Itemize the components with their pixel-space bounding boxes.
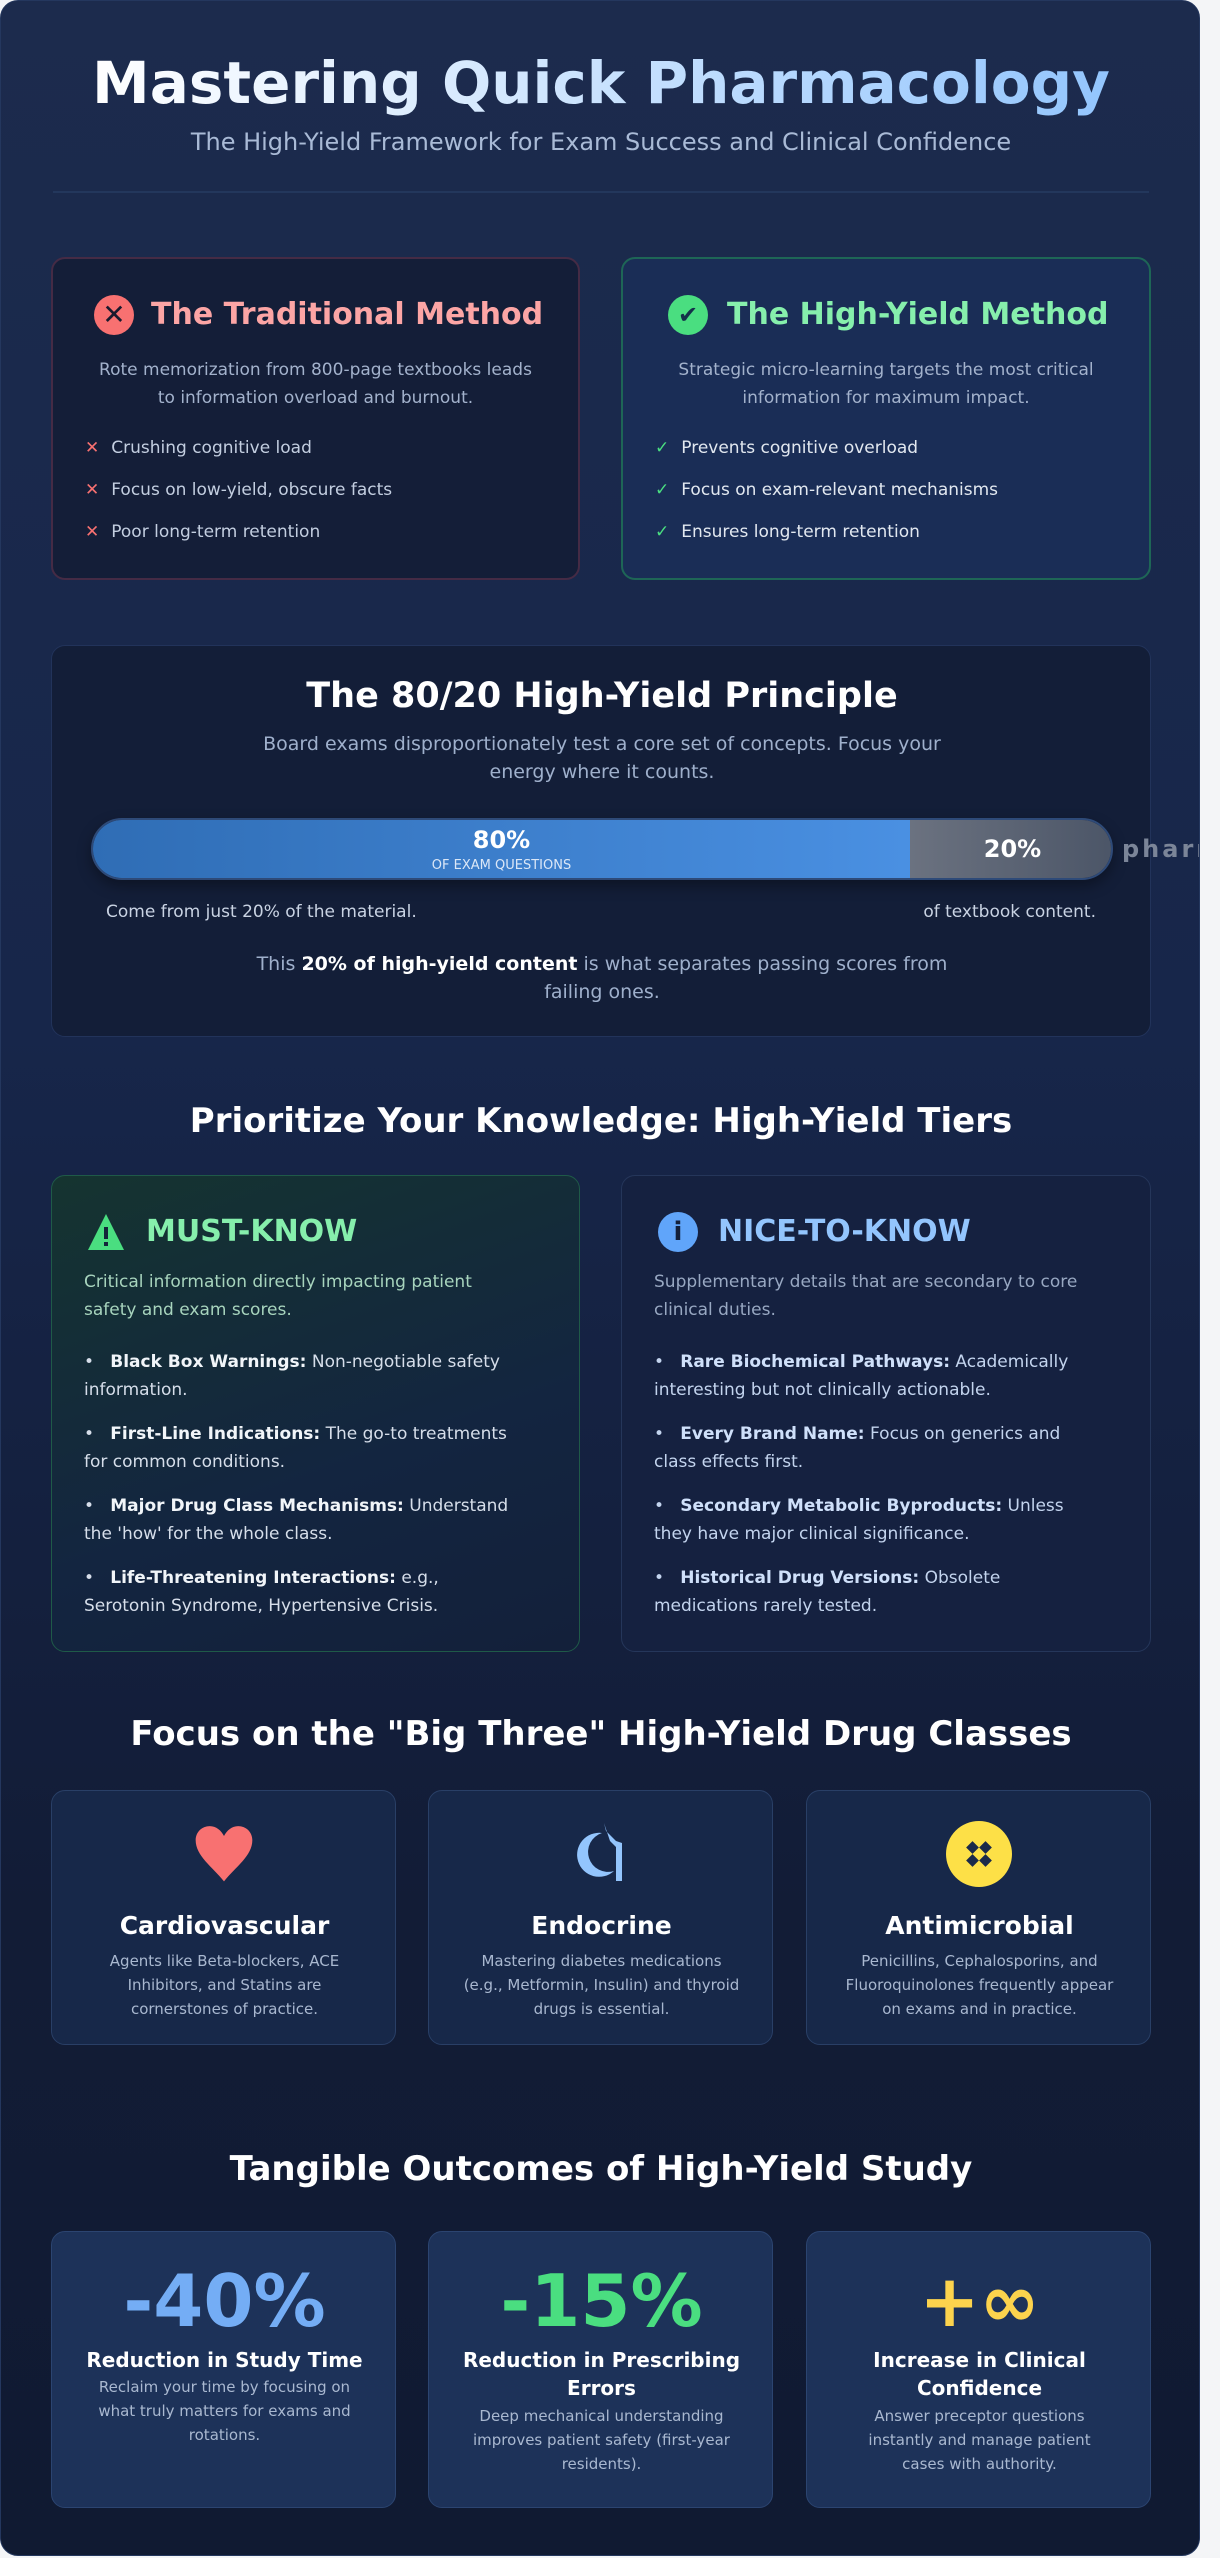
panel: antimicrobial <box>806 1790 1151 2045</box>
stat description: Reclaim your time by focusing on what truly matters for exams and rotations. <box>98 2378 351 2444</box>
icon: endocrine <box>577 1824 622 1881</box>
stat: +∞ <box>919 2259 1040 2343</box>
icon: green check: ✔ <box>678 301 698 329</box>
list: ✕ Poor long-term retention <box>85 522 320 542</box>
bullet list: • Life-Threatening Interactions: e.g., <box>84 1568 439 1588</box>
heading: The High-Yield Method <box>727 297 1108 332</box>
bullet list: • Rare Biochemical Pathways: Academically interesting but not clinically actionable. <box>654 1352 1068 1400</box>
title: Cardiovascular <box>120 1911 329 1940</box>
heading: big three: Focus on the "Big Three" High-Yield Drug Classes <box>130 1714 1072 1754</box>
panel: outcome confidence <box>806 2231 1151 2508</box>
description: Critical information directly impacting patient safety and exam scores. <box>84 1272 472 1320</box>
stat description: Answer preceptor questions instantly and manage patient cases with authority. <box>868 2407 1091 2473</box>
bar: 20%: 20% <box>984 835 1041 863</box>
bar: 20% <box>910 820 1115 882</box>
bullet list <box>84 1352 508 1616</box>
description: Board exams disproportionately test a core set of concepts. Focus your energy where it counts. <box>263 733 941 783</box>
icon: red x <box>94 295 134 335</box>
icon: info: i <box>674 1217 682 1247</box>
description <box>464 1952 739 2018</box>
panel: endocrine <box>428 1790 773 2045</box>
bullet list: • Major Drug Class Mechanisms: Understand the 'how' for the whole class. <box>84 1496 508 1544</box>
stat title: Reduction in Prescribing Errors <box>463 2348 740 2400</box>
stat: -15% <box>500 2259 703 2343</box>
icon: red x: ✕ <box>102 298 126 331</box>
bullet list: • Black Box Warnings: Non-negotiable safety information. <box>84 1352 500 1400</box>
list: ✓ Ensures long-term retention <box>655 522 920 542</box>
panel: high-yield method <box>621 257 1151 580</box>
icon: microbe <box>946 1821 1012 1887</box>
list: ✓ Prevents cognitive overload <box>655 438 918 458</box>
stat title: Reduction in Study Time <box>86 2348 363 2372</box>
heading: tiers: Prioritize Your Knowledge: High-Yield Tiers <box>190 1101 1012 1141</box>
list <box>655 438 998 542</box>
description: Agents like Beta-blockers, ACE Inhibitors, and Statins are cornerstones of practice. <box>110 1952 339 2018</box>
list: ✕ Crushing cognitive load <box>85 438 312 458</box>
heading: outcomes: Tangible Outcomes of High-Yield Study <box>230 2149 972 2189</box>
label right: of textbook content. <box>923 902 1096 922</box>
description: Strategic micro-learning targets the most critical information for maximum impact. <box>678 360 1094 408</box>
panel: traditional method <box>51 257 580 580</box>
list: ✕ Focus on low-yield, obscure facts <box>85 480 392 500</box>
description: Supplementary details that are secondary to core clinical duties. <box>654 1272 1077 1320</box>
description: Penicillins, Cephalosporins, and Fluoroquinolones frequently appear on exams and in practice. <box>846 1952 1113 2018</box>
bullet list <box>654 1352 1068 1616</box>
bar: 80% <box>93 820 910 882</box>
icon: info <box>658 1212 698 1252</box>
title: Antimicrobial <box>885 1911 1074 1940</box>
bullet list: • Every Brand Name: Focus on generics and class effects first. <box>654 1424 1060 1472</box>
bar: 80%: 80% <box>473 826 530 854</box>
conclusion: This 20% of high-yield content is what separates passing scores from failing ones. <box>257 953 947 1003</box>
bullet list: • First-Line Indications: The go-to treatments for common conditions. <box>84 1424 507 1472</box>
bullet list: Serotonin Syndrome, Hypertensive Crisis. <box>84 1596 438 1616</box>
bar: 80%: OF EXAM QUESTIONS <box>432 858 571 873</box>
panel: nice-to-know <box>621 1175 1151 1652</box>
stat title: Increase in Clinical Confidence <box>873 2348 1086 2400</box>
panel: outcome errors <box>428 2231 773 2508</box>
bullet list: • Secondary Metabolic Byproducts: Unless they have major clinical significance. <box>654 1496 1064 1544</box>
panel: outcome study time <box>51 2231 396 2508</box>
panel: cardiovascular <box>51 1790 396 2045</box>
description: Rote memorization from 800-page textbooks leads to information overload and burnout. <box>99 360 532 408</box>
subtitle: The High-Yield Framework for Exam Success and Clinical Confidence <box>191 128 1011 156</box>
heading: NICE-TO-KNOW <box>718 1214 971 1249</box>
heading: MUST-KNOW <box>146 1214 357 1249</box>
panel: must-know <box>51 1175 580 1652</box>
icon: green check <box>668 295 708 335</box>
list <box>85 438 392 542</box>
icon: warning triangle <box>88 1214 124 1250</box>
label left: Come from just 20% of the material. <box>106 902 417 922</box>
stat description: Deep mechanical understanding improves patient safety (first-year residents). <box>473 2407 730 2473</box>
icon: heart <box>196 1826 252 1882</box>
heading: The 80/20 High-Yield Principle <box>306 676 898 716</box>
title: Mastering Quick Pharmacology <box>92 49 1110 117</box>
panel: 80/20 principle <box>51 645 1151 1037</box>
bar chart <box>91 818 1113 880</box>
heading: The Traditional Method <box>151 297 543 332</box>
bullet list: • Historical Drug Versions: Obsolete medications rarely tested. <box>654 1568 1000 1616</box>
description: Mastering diabetes medications <box>481 1952 722 1970</box>
list: ✓ Focus on exam-relevant mechanisms <box>655 480 998 500</box>
title: Endocrine <box>531 1911 672 1940</box>
stat: -40% <box>123 2259 326 2343</box>
description: (e.g., Metformin, Insulin) and thyroid drugs is essential. <box>464 1976 739 2018</box>
